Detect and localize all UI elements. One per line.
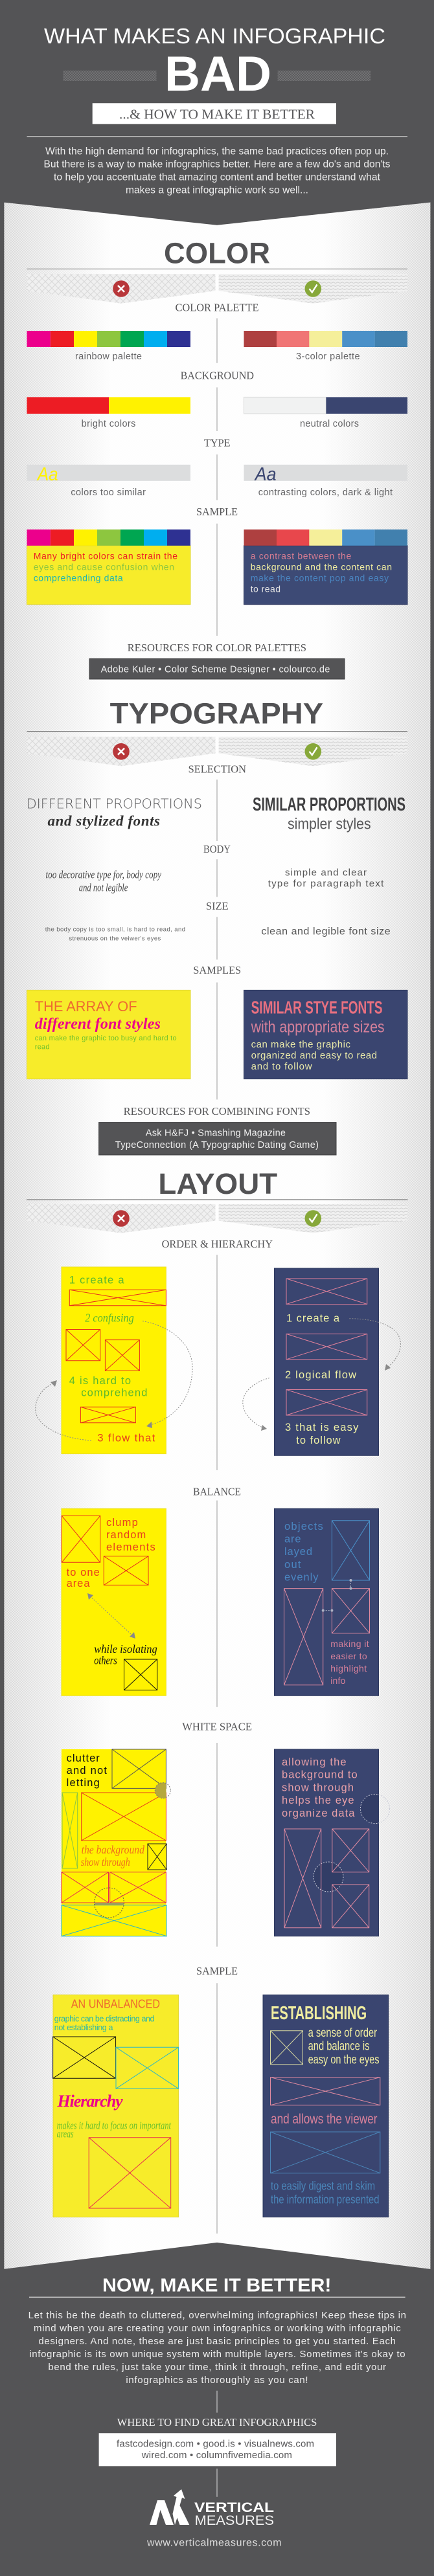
resources: combining fonts: Ask H&FJ • Smashing Magazine [146,1128,286,1139]
color sample: bad: Many bright colors can strain the [34,550,177,561]
do / don't banner: color [27,274,407,304]
section heading: TYPOGRAPHY: TYPOGRAPHY [110,697,323,730]
footer paragraph: infographic is its own unique system with multiple layers. Sometimes it's okay to [29,2349,405,2360]
footer paragraph: designers. And note, these are just basic principles to get you started. Each [38,2336,396,2347]
typography sample: good: and to follow [251,1061,312,1072]
balance panel: bad: random [106,1529,146,1541]
arrow: good flow 2 to 3 [243,1378,269,1431]
balance panel: bad: elements [106,1541,155,1553]
balance panel: bad: while isolating [94,1642,157,1655]
size: legible text: clean and legible font size [261,926,391,937]
white space panel: good: show through [282,1782,354,1793]
logo: Vertical Measures: VERTICAL [194,2500,274,2515]
label: type: TYPE [204,437,231,449]
layout sample: good: a sense of order [308,2026,378,2040]
bright colors bar: bright colors [82,419,135,429]
balance panel: bad: to one [67,1567,100,1578]
selection: good fonts [253,794,405,833]
white space marker: right [360,1794,390,1824]
bright colors bar [27,397,190,429]
layout sample: bad: makes it hard to focus on important [57,2119,172,2131]
typography sample: good [244,990,407,1079]
label: size: SIZE [206,900,229,912]
layout sample: bad: AN UNBALANCED [71,1998,160,2011]
label: sample: SAMPLE [196,1965,238,1977]
footer paragraph: mind when you are creating your own infographics or working with infographic [34,2323,401,2334]
color sample: good [244,530,407,605]
intro paragraph: to help you accentuate that amazing content and better understand what [54,172,381,183]
layout sample: good: the information presented [271,2193,380,2206]
resources: color palettes [89,642,345,679]
do / don't banner: typography [27,737,407,766]
resources: color palettes: RESOURCES FOR COLOR PALETTES [128,642,306,654]
title: BAD: BAD [165,47,271,102]
selection: bad fonts: DIFFERENT PROPORTIONS [27,796,202,812]
layout sample: bad: areas [57,2128,74,2140]
white space panel: good [275,1749,390,1936]
order panel: bad: comprehend [81,1387,147,1398]
white space panel: bad [62,1749,170,1936]
typography sample: bad: can make the graphic too busy and hard to [35,1035,177,1042]
layout sample: bad: not establishing a [54,2023,113,2032]
header panel [0,0,434,225]
balance panel: good: layed [284,1546,312,1558]
order panel: good [275,1268,378,1455]
label: samples: SAMPLES [193,964,241,976]
do / don't banner: layout [27,1204,407,1233]
balance panel: good: making it [330,1639,369,1649]
typography sample: good: can make the graphic [251,1039,351,1050]
title line: WHAT MAKES AN INFOGRAPHIC [44,25,385,49]
layout sample: good: and allows the viewer [271,2112,377,2127]
label: balance: BALANCE [193,1485,241,1497]
selection: bad fonts [27,796,202,829]
layout sample: good: easy on the eyes [308,2054,380,2067]
type sample: high contrast [244,464,407,498]
where to find block: wired.com • columnfivemedia.com [141,2450,292,2461]
order panel: bad: 2 confusing [85,1312,134,1325]
balance panel: good: objects [284,1521,323,1532]
resources: combining fonts: RESOURCES FOR COMBINING FONTS [124,1105,310,1117]
order panel: good: 2 logical flow [285,1369,356,1381]
footer panel [0,2243,434,2576]
where to find block: WHERE TO FIND GREAT INFOGRAPHICS [117,2416,317,2428]
arrow: good flow 1 to 2 [349,1319,400,1371]
layout sample: bad: graphic can be distracting and [54,2014,155,2023]
white space panel: bad: clutter [67,1753,100,1764]
footer paragraph: Let this be the death to cluttered, overwhelming infographics! Keep these tips in [29,2310,406,2321]
where to find block [99,2416,336,2466]
typography sample: bad: THE ARRAY OF [35,998,137,1014]
white space marker: lower [314,1862,343,1892]
subtitle box [93,103,336,124]
neutral colors bar: neutral colors [300,419,359,429]
balance panel: good: out [284,1559,301,1571]
type sample: high contrast: Aa [254,464,277,485]
intro paragraph: makes a great infographic work so well... [126,185,308,196]
label: selection: SELECTION [188,763,246,775]
layout sample: bad: Hierarchy [57,2092,123,2111]
typography sample: bad: different font styles [35,1016,161,1033]
order panel: bad: 4 is hard to [69,1375,131,1387]
neutral colors bar [244,397,407,429]
label: white space: WHITE SPACE [182,1721,252,1733]
type sample: high contrast: contrasting colors, dark & light [258,487,393,498]
size: too small text [45,926,185,942]
order panel: bad [62,1267,166,1454]
label: body: BODY [203,843,231,855]
connector marks [322,1580,352,1611]
color sample: good: background and the content can [251,561,392,572]
layout sample: good [263,1995,389,2217]
logo: Vertical Measures: MEASURES [195,2513,274,2528]
resources: color palettes: Adobe Kuler • Color Scheme Designer • colourco.de [101,664,330,675]
body: decorative text: and not legible [79,881,128,893]
balance panel: good: highlight [330,1663,367,1674]
white space panel: bad: show through [81,1855,130,1868]
website url: www.verticalmeasures.com [146,2538,282,2549]
type sample: low contrast: colors too similar [71,487,146,498]
white space panel: bad: letting [67,1777,100,1789]
white space marker: top [155,1783,170,1798]
color sample: good: a contrast between the [251,550,352,561]
label: color palette: COLOR PALETTE [175,302,259,314]
layout sample: bad [53,1995,179,2217]
size: too small text: strenuous on the veiwer's eyes [69,935,161,942]
typography sample: bad [27,990,190,1079]
white space panel: bad: the background [82,1843,145,1856]
balance panel: good: are [284,1533,301,1545]
where to find block: fastcodesign.com • good.is • visualnews.com [117,2438,314,2449]
white space panel: good: background to [282,1769,358,1781]
balance panel: bad: others [94,1654,117,1667]
balance panel: good [275,1508,378,1696]
body: simple text [268,868,384,890]
type sample: low contrast: Aa [36,464,58,485]
footer paragraph [29,2310,406,2386]
color sample: bad [27,530,190,605]
rainbow palette bar [27,331,190,362]
section heading: LAYOUT: LAYOUT [158,1167,277,1200]
balance panel: bad: clump [106,1517,138,1529]
resources: combining fonts [99,1105,336,1155]
intro paragraph: With the high demand for infographics, the same bad practices often pop up. [45,146,389,157]
layout sample: good: to easily digest and skim [271,2179,375,2192]
intro paragraph [44,146,391,196]
size: too small text: the body copy is too small, is hard to read, and [45,926,185,933]
intro paragraph: But there is a way to make infographics better. Here are a few do's and don'ts [44,159,391,170]
order panel: bad: 1 create a [69,1274,124,1286]
section heading: COLOR: COLOR [164,237,270,270]
resources: combining fonts: TypeConnection (A Typographic Dating Game) [115,1140,319,1150]
balance panel: bad [62,1508,166,1696]
3-color palette bar: 3-color palette [296,352,360,362]
label: sample: SAMPLE [196,506,238,518]
footer paragraph: infographics as thoroughly as you can! [126,2375,308,2386]
balance panel: bad: area [67,1578,90,1589]
white space panel: bad: and not [67,1765,107,1776]
title side pattern bars [63,71,371,81]
typography sample: good: with appropriate sizes [251,1018,385,1036]
color sample: good: make the content pop and easy [251,572,389,583]
white space panel: good: allowing the [282,1756,347,1768]
3-color palette bar [244,331,407,362]
order panel: good: to follow [296,1435,341,1446]
body: decorative text: too decorative type for, body copy [45,869,161,881]
order panel: good: 3 that is easy [285,1422,359,1433]
arrow: isolation distance [87,1593,135,1639]
selection: good fonts: simpler styles [288,816,371,833]
type sample: low contrast [27,464,190,498]
color sample: bad: eyes and cause confusion when [34,561,174,572]
white space panel: good: helps the eye [282,1795,354,1806]
typography sample: bad: read [35,1044,49,1051]
logo: Vertical Measures [150,2489,274,2528]
subtitle box: ...& HOW TO MAKE IT BETTER [119,106,315,122]
color sample: bad: comprehending data [34,572,123,583]
footer heading: NOW, MAKE IT BETTER! [102,2275,332,2296]
label: order and hierarchy: ORDER & HIERARCHY [162,1238,273,1250]
layout sample: good: and balance is [308,2040,369,2054]
typography sample: good: organized and easy to read [251,1050,377,1061]
label: background: BACKGROUND [181,369,254,381]
order panel: bad: 3 flow that [97,1432,155,1444]
balance panel: good: evenly [284,1572,319,1584]
body: decorative text [45,869,161,893]
footer paragraph: bend the rules, just take your time, think it through, refine, and edit your [48,2362,386,2373]
white space panel: good: organize data [282,1808,355,1819]
white space marker: center [94,1888,124,1918]
layout sample: good: ESTABLISHING [271,2003,367,2024]
order panel: good: 1 create a [286,1313,340,1325]
rainbow palette bar: rainbow palette [75,352,142,362]
selection: bad fonts: and stylized fonts [48,813,160,829]
balance panel: good: info [330,1675,346,1686]
arrow: bad flow 2 to 3 [143,1321,192,1428]
body: simple text: simple and clear [285,868,367,879]
color sample: good: to read [251,583,280,594]
balance panel: good: easier to [330,1651,367,1661]
arrow: bad flow 3 to 4 [36,1380,91,1440]
body: simple text: type for paragraph text [268,879,384,890]
